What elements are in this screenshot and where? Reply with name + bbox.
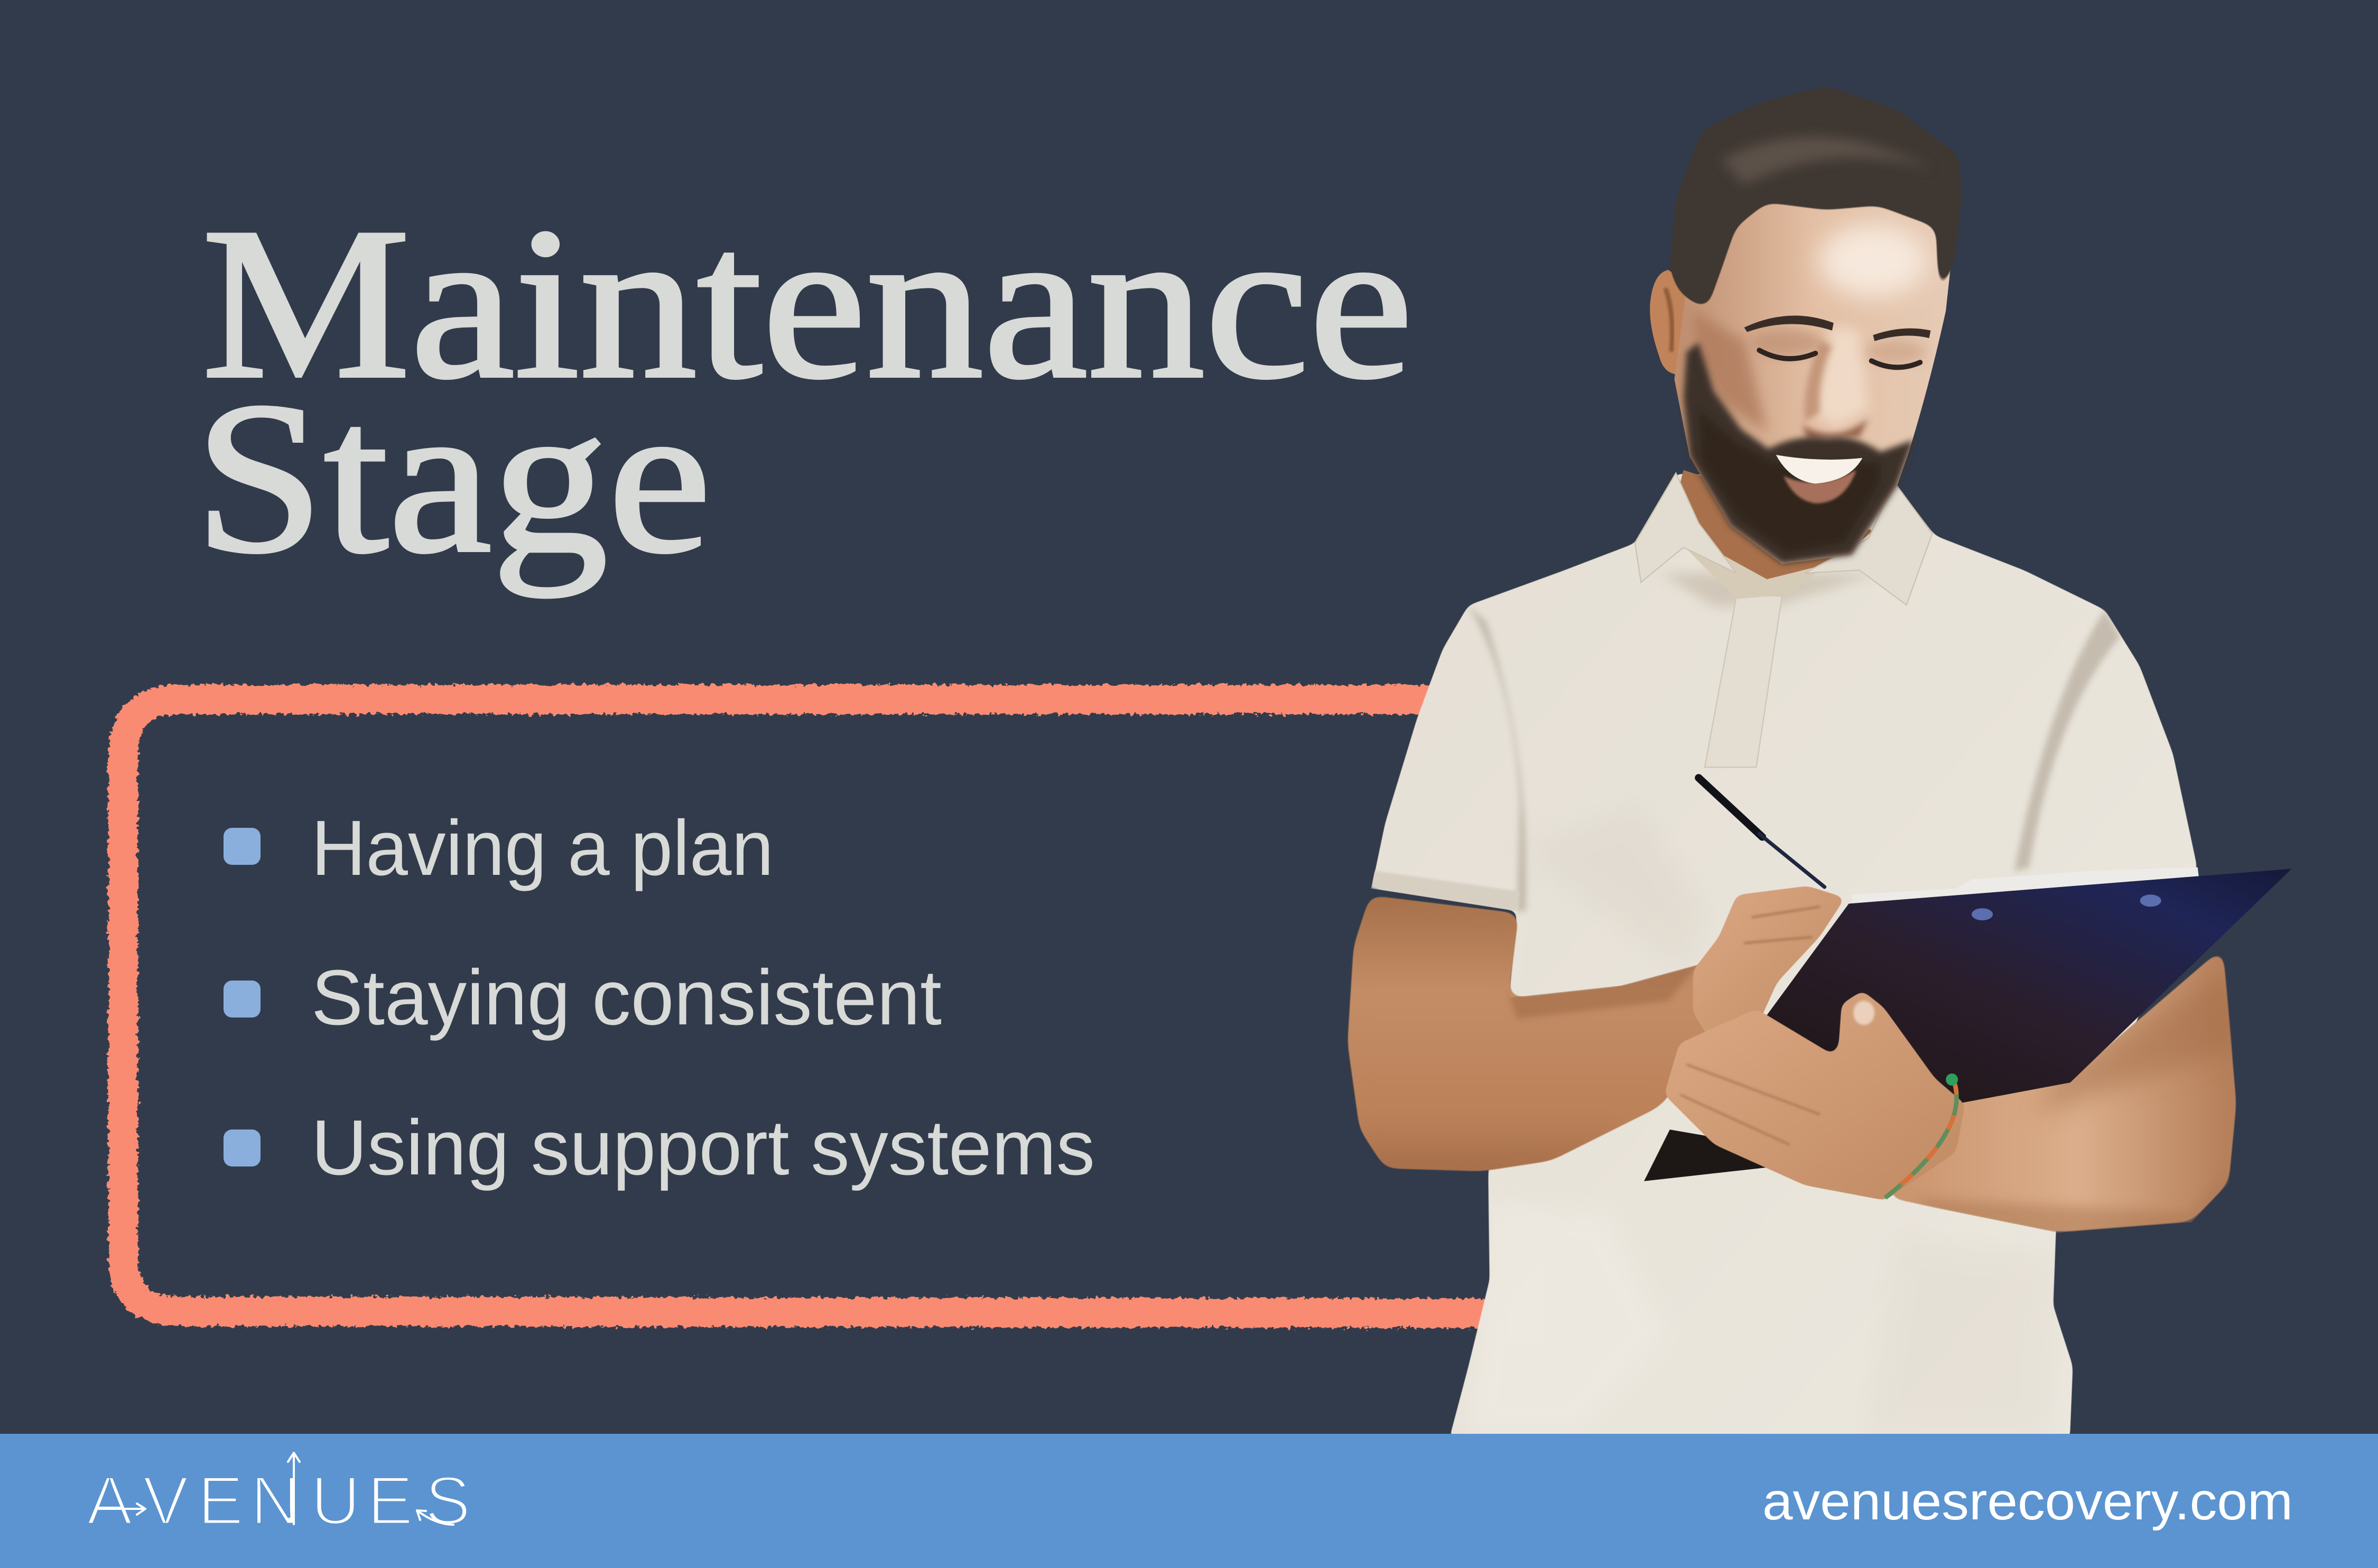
neck [1676, 470, 1873, 579]
bullet text: Staying consistent [311, 954, 942, 1041]
curved arrow on S [417, 1510, 453, 1525]
title line 1: Maintenance [202, 183, 1413, 423]
right forearm [1885, 946, 2237, 1233]
hair [1668, 85, 1963, 309]
eyebrows [1744, 315, 1931, 341]
clipboard [1644, 869, 2292, 1181]
right forearm shading [1911, 970, 2245, 1243]
logo: avenues [87, 1453, 471, 1539]
collar [1635, 473, 1932, 605]
bullet item: using support systems [224, 1104, 1095, 1191]
left cheek shadow [1693, 311, 1767, 432]
clipboard lower tail [1644, 1130, 1767, 1181]
bullet list [224, 805, 1095, 1191]
pen [1698, 778, 1825, 887]
website url: avenuesrecovery.com [1762, 1472, 2293, 1531]
bracelet band [1885, 1079, 1957, 1198]
logo arrows [97, 1453, 453, 1525]
beard core [1698, 409, 1881, 554]
arrow up from N [288, 1453, 300, 1524]
clip hole right [2140, 894, 2161, 907]
closed eyes [1759, 350, 1920, 367]
left arm inner shading [1509, 963, 1698, 1019]
bracelet [1885, 1079, 1957, 1198]
face [1674, 167, 1952, 564]
inner collar [1686, 546, 1827, 599]
clip holes [1972, 908, 1993, 920]
bullet marker [224, 1130, 261, 1166]
left arm [1347, 894, 1729, 1172]
photo: man writing on clipboard [1347, 85, 2292, 1441]
thumb nail [1853, 1001, 1874, 1025]
hair highlight [1721, 137, 1934, 185]
placket [1705, 596, 1782, 767]
bracelet knot [1946, 1074, 1958, 1086]
ear [1650, 270, 1689, 374]
footer band [0, 1434, 2378, 1568]
coral hand-drawn border [123, 699, 1559, 1313]
forehead highlight [1818, 225, 1928, 297]
lower lip [1784, 470, 1856, 503]
beard [1684, 343, 1914, 564]
bullet text: Using support systems [311, 1104, 1095, 1191]
bracelet colors [1885, 1079, 1957, 1198]
teeth [1776, 455, 1862, 484]
left brow [1744, 315, 1834, 332]
pen tip [1759, 834, 1825, 887]
shirt [1371, 473, 2198, 1440]
inner ear shadow [1665, 288, 1672, 352]
arrow right through A [97, 1504, 145, 1515]
bullet text: Having a plan [311, 805, 774, 892]
title [194, 183, 1413, 598]
eye socket shadow right [1865, 340, 1926, 364]
pen barrel [1698, 778, 1762, 837]
paper on clipboard [1852, 867, 2199, 910]
eye socket shadow left [1750, 329, 1823, 356]
bullet item: having a plan [224, 805, 774, 892]
nose highlight [1814, 326, 1869, 427]
collar right flap [1805, 482, 1932, 605]
right eye [1872, 361, 1920, 367]
collar left flap [1635, 473, 1736, 582]
left eye [1759, 350, 1815, 359]
bullet marker [224, 981, 261, 1018]
bullet marker [224, 828, 261, 865]
bullet item: staying consistent [224, 954, 942, 1041]
writing hand [1693, 885, 1846, 1046]
finger creases [1744, 907, 1820, 943]
right brow [1873, 328, 1931, 341]
logo wordmark: AVENUES [87, 1462, 471, 1539]
finger lines [1680, 1065, 1820, 1145]
holding hand [1664, 990, 1966, 1201]
title line 2: Stage [194, 358, 711, 598]
nose side shadow [1804, 341, 1832, 422]
nose underside shadow [1802, 418, 1869, 440]
